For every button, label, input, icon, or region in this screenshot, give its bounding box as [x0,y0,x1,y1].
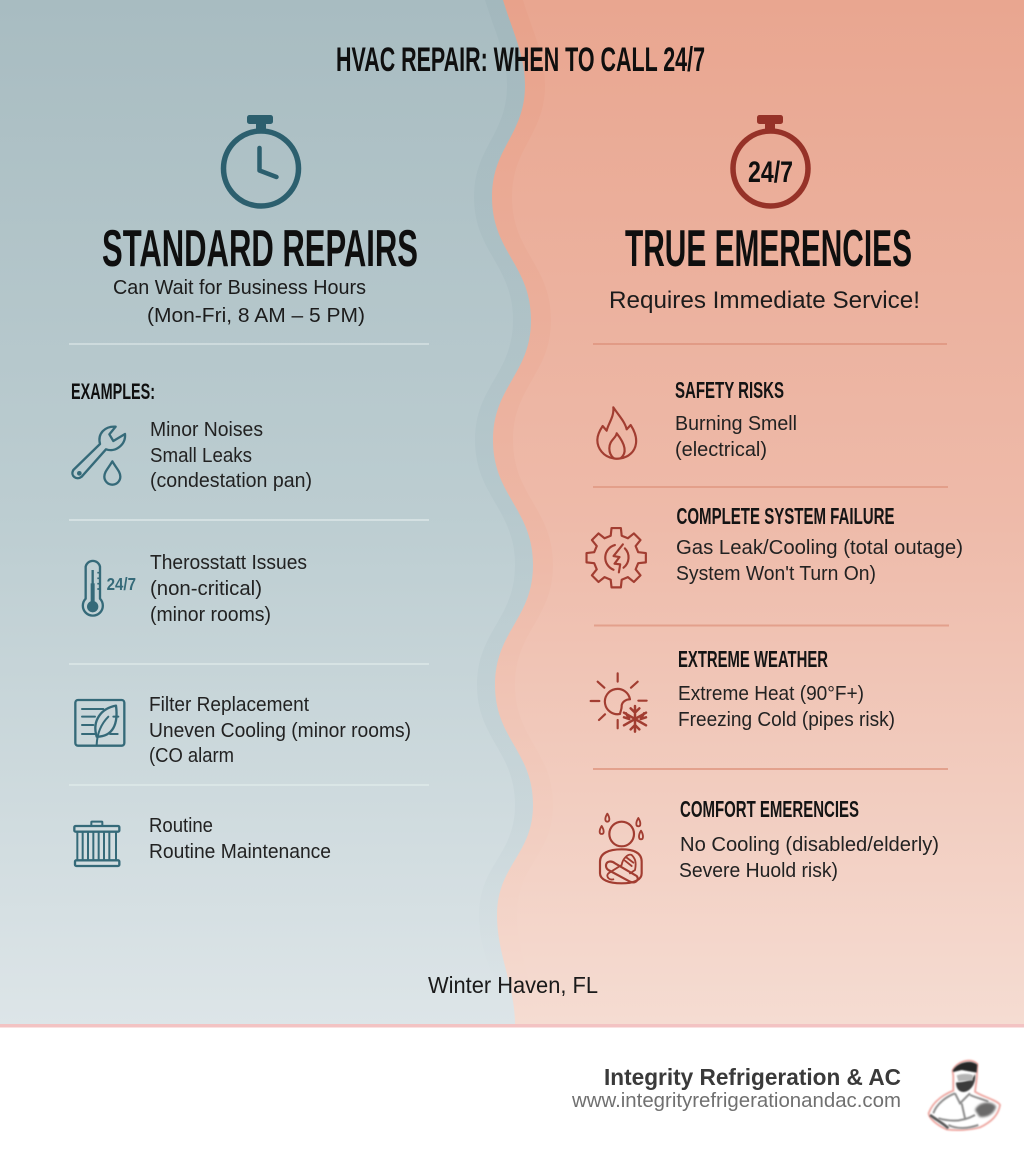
text: thermostat issues [150,552,307,626]
text: thermostat issues: (non-critical) [150,578,262,600]
text: comfort emergencies: COMFORT EMERENCIES [680,796,859,822]
icon: flame [597,407,636,459]
subheading: business hours [113,276,366,327]
icon: air filter cartridge [74,822,119,866]
text: comfort emergencies: No Cooling (disabled/elderly) [680,834,939,856]
subheading: business hours: Can Wait for Business Hours [113,276,366,299]
text: extreme weather [678,646,895,731]
text: minor noises and leaks: (condestation pan) [150,470,312,492]
icon: 24/7 stopwatch [733,115,808,206]
text: minor noises and leaks: Minor Noises [150,419,263,441]
text: thermostat issues: (minor rooms) [150,604,271,626]
text: minor noises and leaks [150,419,312,492]
text: comfort emergencies: Severe Huold risk) [679,860,838,882]
location label: Winter Haven, FL [428,972,598,998]
icon: mechanic mascot [929,1061,1000,1130]
text: safety risks: (electrical) [675,439,767,461]
text: complete system failure: System Won't Turn On) [676,563,876,585]
panel: true emergencies [587,115,963,883]
text: extreme weather: EXTREME WEATHER [678,646,828,672]
text: thermostat issues: Therosstatt Issues [150,552,307,574]
text: filter replacement: (CO alarm [149,745,234,767]
subheading: business hours: (Mon-Fri, 8 AM – 5 PM) [147,304,365,327]
heading: standard repairs: STANDARD REPAIRS [102,220,418,278]
text: extreme weather: Extreme Heat (90°F+) [678,683,864,705]
icon: thermometer 24/7 [83,561,136,616]
text: safety risks [675,377,797,461]
title: HVAC REPAIR: WHEN TO CALL 24/7 [336,41,705,79]
text: minor noises and leaks: Small Leaks [150,445,252,467]
text: routine maintenance: Routine Maintenance [149,841,331,863]
text: complete system failure [676,503,963,585]
text: filter replacement: Uneven Cooling (minor rooms) [149,720,411,742]
label: examples: EXAMPLES: [71,379,155,404]
text: complete system failure: Gas Leak/Cooling (total outage) [676,537,963,559]
text: routine maintenance [149,815,331,863]
panel: standard repairs [69,115,429,866]
footer [0,1024,1024,1154]
text: filter replacement [149,694,411,767]
text: routine maintenance: Routine [149,815,213,837]
website: www.integrityrefrigerationandac.com [571,1090,901,1112]
icon: thermometer 24/7: 24/7 [107,574,136,594]
text: complete system failure: COMPLETE SYSTEM FAILURE [676,503,894,529]
icon: gear with bolt [587,528,646,587]
text: filter replacement: Filter Replacement [149,694,309,716]
subheading: immediate service: Requires Immediate Service! [609,287,920,314]
icon: person with crossed arms and sweat [600,814,643,883]
text: safety risks: SAFETY RISKS [675,377,784,403]
icon: wrench and drop [72,427,125,485]
company name: Integrity Refrigeration & AC [604,1064,901,1090]
text: safety risks: Burning Smell [675,413,797,435]
icon: sun and snowflake [591,673,647,732]
text: extreme weather: Freezing Cold (pipes risk) [678,709,895,731]
text: comfort emergencies [679,796,939,882]
icon: 24/7 stopwatch: 24/7 [748,156,793,189]
icon: stopwatch [224,115,298,206]
icon: filter with leaf [75,700,124,746]
